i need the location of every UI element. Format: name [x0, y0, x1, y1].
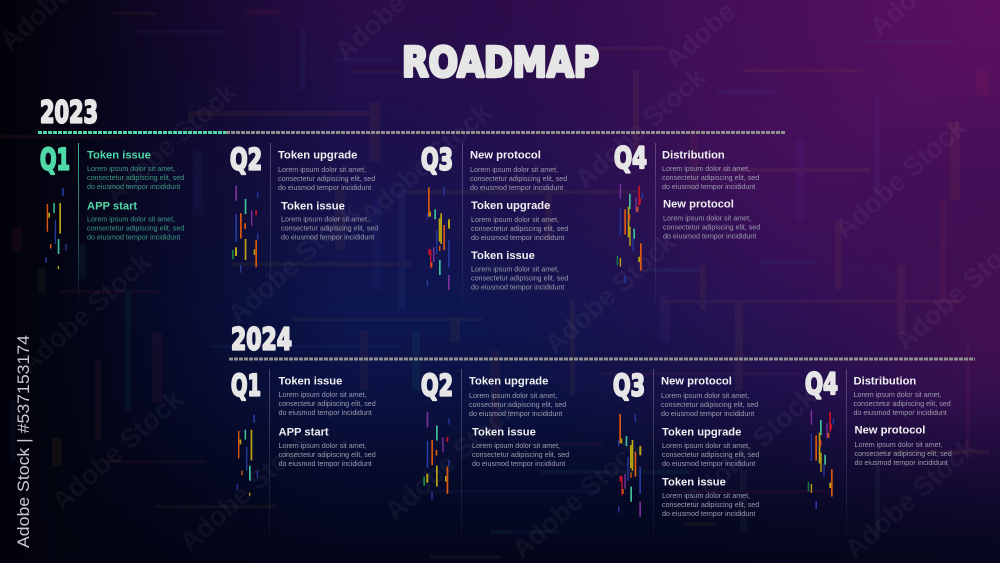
glitch bars — [618, 414, 641, 517]
Q3 label: Q3 — [613, 368, 645, 402]
item: Distribution — [854, 376, 951, 417]
item: APP start: consectetur adipiscing elit, sed — [278, 451, 376, 459]
item: New protocol — [854, 424, 952, 467]
item: Token upgrade — [469, 376, 566, 418]
glitch bars — [45, 188, 67, 269]
divider — [78, 143, 79, 308]
panel: 2023 Q2 — [230, 142, 378, 308]
stock watermarks: Adobe Stock — [46, 383, 189, 516]
item: Distribution: do eiusmod tempor incididunt — [662, 183, 755, 191]
stock watermarks: Adobe Stock — [506, 431, 649, 563]
item: Token issue: Token issue — [471, 250, 535, 262]
item: Token upgrade: consectetur adipiscing elit, sed — [662, 451, 759, 459]
stock watermarks: Adobe Stock — [14, 246, 157, 379]
item: Token upgrade: Lorem ipsum dolor sit amet, — [469, 392, 557, 400]
item: Distribution: consectetur adipiscing elit, sed — [662, 174, 759, 182]
item: Token issue: consectetur adipiscing elit, sed — [87, 174, 184, 182]
item: Token issue — [471, 250, 568, 292]
item: New protocol: New protocol — [661, 376, 732, 388]
item: APP start — [278, 426, 376, 468]
stock watermarks: Adobe Stock — [222, 196, 365, 329]
item: Token upgrade: do eiusmod tempor incididunt — [471, 234, 564, 242]
item: Token issue: Lorem ipsum dolor sit amet, — [278, 391, 367, 399]
item: Token upgrade: Token upgrade — [469, 376, 548, 388]
item: Token issue: do eiusmod tempor incididunt — [472, 460, 565, 468]
item: Token issue: Token issue — [472, 426, 536, 438]
panel: 2024 Q1 — [231, 368, 376, 537]
item: Token issue: consectetur adipiscing elit, sed — [472, 451, 569, 459]
item: Token issue: Token issue — [87, 150, 151, 162]
item: New protocol: do eiusmod tempor incididunt — [661, 410, 754, 418]
panel: 2024 Q4 — [805, 367, 952, 537]
item: Token issue: do eiusmod tempor incididunt — [278, 409, 372, 417]
item: New protocol — [661, 376, 758, 418]
panel: 2024 Q3 — [613, 368, 759, 537]
item: New protocol: do eiusmod tempor incididunt — [663, 232, 756, 240]
item: Token issue: Lorem ipsum dolor sit amet, — [87, 165, 175, 173]
divider — [269, 369, 270, 537]
item: New protocol — [470, 150, 567, 192]
item: Token upgrade: Lorem ipsum dolor sit amet, — [662, 442, 750, 450]
divider — [461, 369, 462, 537]
stock watermarks: Adobe Stock — [829, 111, 972, 244]
item: Token upgrade: do eiusmod tempor incididunt — [469, 410, 562, 418]
divider — [846, 369, 847, 537]
item: New protocol: Lorem ipsum dolor sit amet, — [661, 392, 749, 400]
stock watermarks: Adobe Stock — [679, 381, 822, 514]
timeline 2023 — [38, 131, 785, 134]
Q1 label: Q1 — [231, 368, 261, 402]
divider — [655, 143, 656, 308]
item: New protocol: Lorem ipsum dolor sit amet, — [663, 214, 751, 222]
item: APP start: do eiusmod tempor incididunt — [87, 234, 180, 242]
item: Token upgrade: consectetur adipiscing elit, sed — [471, 225, 568, 233]
year 2024 heading: 2024 — [231, 322, 292, 358]
item: Token issue: Token issue — [278, 376, 342, 388]
item: Distribution: do eiusmod tempor incididunt — [854, 409, 947, 417]
item: Token issue: do eiusmod tempor incididunt — [281, 234, 374, 242]
stock watermarks: Adobe Stock — [539, 226, 682, 359]
divider — [462, 143, 463, 308]
title: ROADMAP — [402, 38, 599, 86]
glitch bars — [617, 184, 643, 283]
item: APP start: consectetur adipiscing elit, sed — [87, 224, 184, 232]
glitch bars — [423, 412, 450, 499]
panel: 2023 Q1 — [40, 142, 184, 308]
item: Distribution: Distribution — [854, 376, 916, 388]
item: New protocol: Lorem ipsum dolor sit amet, — [470, 166, 558, 174]
stock watermarks: Adobe Stock — [354, 96, 497, 229]
item: Token issue: Token issue — [662, 476, 726, 488]
item: New protocol: consectetur adipiscing elit, sed — [854, 450, 952, 458]
item: Token upgrade — [662, 426, 759, 468]
Q3 label: Q3 — [421, 142, 453, 176]
divider — [653, 369, 654, 537]
glitch bars — [427, 187, 450, 290]
item: Token issue: consectetur adipiscing elit, sed — [471, 274, 568, 282]
item: Token issue: Lorem ipsum dolor sit amet, — [471, 266, 559, 274]
item: Distribution: Lorem ipsum dolor sit amet, — [662, 165, 750, 173]
item: New protocol: consectetur adipiscing elit, sed — [663, 224, 760, 232]
stock watermarks: Adobe Stock — [379, 393, 522, 526]
item: Token upgrade — [278, 150, 375, 192]
item: New protocol: New protocol — [470, 150, 541, 162]
stock watermarks: Adobe Stock — [174, 424, 317, 557]
Q4 label: Q4 — [614, 141, 647, 175]
panel: 2024 Q2 — [421, 368, 569, 537]
item: Token upgrade — [471, 200, 568, 242]
item: APP start: Lorem ipsum dolor sit amet, — [87, 216, 175, 224]
panel: 2023 Q4 — [614, 141, 760, 308]
item: Token issue: do eiusmod tempor incididunt — [662, 510, 755, 518]
item: Distribution — [662, 150, 759, 191]
item: Token upgrade: do eiusmod tempor incididunt — [662, 460, 755, 468]
Q2 label: Q2 — [230, 142, 262, 176]
item: APP start — [87, 200, 184, 242]
item: APP start: do eiusmod tempor incididunt — [278, 460, 372, 468]
item: New protocol: consectetur adipiscing elit, sed — [470, 175, 567, 183]
item: New protocol: New protocol — [854, 424, 925, 436]
item: New protocol: do eiusmod tempor incididunt — [854, 459, 948, 467]
item: Token issue — [281, 200, 378, 242]
item: Token issue: Lorem ipsum dolor sit amet, — [662, 492, 750, 500]
item: Token upgrade: Lorem ipsum dolor sit amet, — [471, 216, 559, 224]
item: Token issue: do eiusmod tempor incididunt — [471, 284, 564, 292]
stock watermarks: Adobe Stock — [569, 61, 712, 194]
Q1 label: Q1 — [40, 142, 70, 176]
item: Token issue: Lorem ipsum dolor sit amet, — [472, 442, 560, 450]
stock watermarks: Adobe Stock — [839, 431, 982, 563]
item: Token issue: Token issue — [281, 200, 345, 212]
item: New protocol: do eiusmod tempor incididunt — [470, 184, 563, 192]
divider — [270, 143, 271, 308]
item: New protocol: consectetur adipiscing elit, sed — [661, 401, 758, 409]
item: Token upgrade: consectetur adipiscing elit, sed — [278, 175, 375, 183]
item: APP start: APP start — [87, 200, 137, 212]
item: Token issue — [472, 426, 569, 468]
Q2 label: Q2 — [421, 368, 453, 402]
item: Token issue: Lorem ipsum dolor sit amet, — [281, 216, 369, 224]
item: Token issue: consectetur adipiscing elit, sed — [281, 224, 378, 232]
item: Token issue — [278, 376, 376, 417]
item: Token upgrade: Token upgrade — [662, 426, 741, 438]
item: Distribution: Lorem ipsum dolor sit amet, — [854, 391, 942, 399]
item: APP start: Lorem ipsum dolor sit amet, — [278, 442, 367, 450]
item: New protocol — [663, 198, 760, 240]
item: Token issue: do eiusmod tempor incididunt — [87, 183, 180, 191]
item: Token upgrade: Lorem ipsum dolor sit amet, — [278, 166, 366, 174]
item: Token upgrade: consectetur adipiscing elit, sed — [469, 401, 566, 409]
item: Token issue — [87, 150, 184, 191]
item: Token upgrade: Token upgrade — [278, 150, 357, 162]
panel: 2023 Q3 — [421, 142, 568, 308]
timeline 2024 — [229, 358, 975, 360]
stock watermarks: Adobe Stock — [99, 76, 242, 209]
year 2023 heading: 2023 — [40, 96, 98, 130]
item: Token upgrade: Token upgrade — [471, 200, 550, 212]
item: Token issue: consectetur adipiscing elit, sed — [662, 501, 759, 509]
glitch bars — [808, 410, 834, 509]
item: New protocol: New protocol — [663, 198, 734, 210]
item: Token issue — [662, 476, 759, 518]
Q4 label: Q4 — [805, 367, 838, 401]
item: Distribution: consectetur adipiscing elit, sed — [854, 400, 951, 408]
item: Token issue: consectetur adipiscing elit, sed — [278, 400, 376, 408]
item: Distribution: Distribution — [662, 150, 725, 162]
item: Token upgrade: do eiusmod tempor incididunt — [278, 184, 371, 192]
item: New protocol: Lorem ipsum dolor sit amet, — [854, 441, 943, 449]
glitch bars — [232, 186, 258, 273]
item: APP start: APP start — [278, 426, 329, 438]
stock id vertical label: Adobe Stock | #537153174 — [14, 335, 33, 548]
glitch bars — [237, 415, 258, 496]
